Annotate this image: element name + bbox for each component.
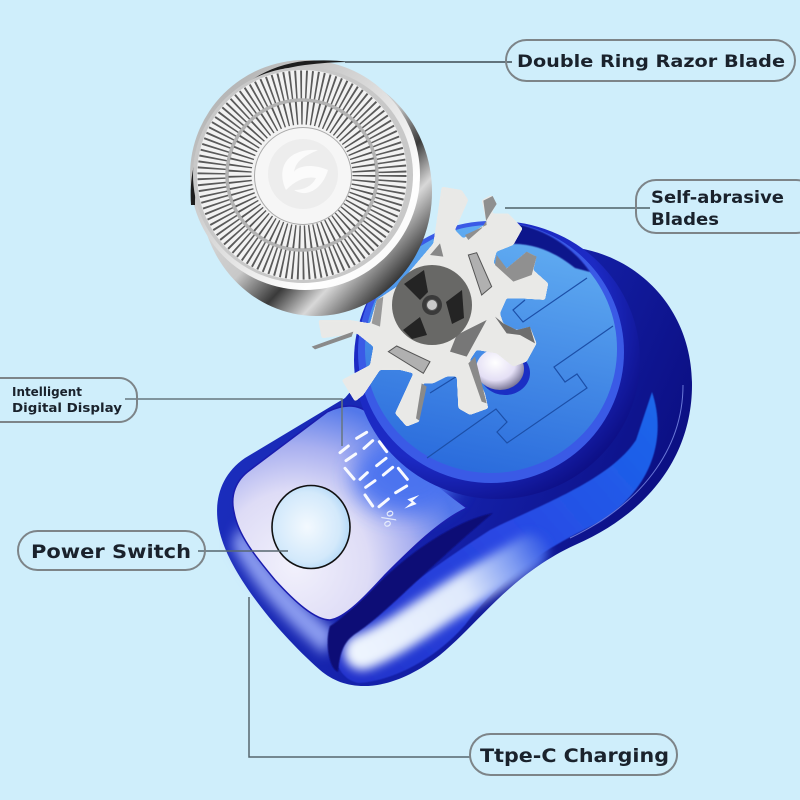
outer blade spokes xyxy=(212,85,392,265)
digital display xyxy=(340,432,419,530)
top shade stripes xyxy=(500,222,590,272)
middle ring xyxy=(227,100,377,250)
lower blue region xyxy=(336,392,658,683)
power button xyxy=(272,486,350,568)
callout: double ring razor blade: Double Ring Razor Blade xyxy=(517,52,785,72)
shaver body xyxy=(217,221,692,686)
callout: type-c charging xyxy=(249,597,677,775)
inner blade spokes xyxy=(240,113,364,237)
display glow xyxy=(353,439,457,515)
lower capsule highlight xyxy=(362,552,530,652)
blade outline xyxy=(312,187,548,427)
metal side xyxy=(200,68,432,316)
callout: intelligent digital display: Intelligent xyxy=(12,384,82,399)
back dark ring xyxy=(354,221,640,499)
callout: self-abrasive blades: Self-abrasive xyxy=(651,188,784,208)
navy band xyxy=(328,513,493,672)
callout: intelligent digital display: Digital Display xyxy=(12,400,122,415)
foil xyxy=(197,70,407,280)
callout: intelligent digital display xyxy=(0,378,342,446)
left edge highlight xyxy=(232,525,335,655)
self-abrasive blade star xyxy=(312,187,548,427)
callout: power switch: Power Switch xyxy=(31,541,191,563)
hub windows xyxy=(403,270,464,339)
hub screw xyxy=(422,295,442,315)
body shell xyxy=(217,240,692,686)
outer rim xyxy=(190,60,420,290)
pearl button xyxy=(476,348,530,395)
circuit lines xyxy=(427,278,613,458)
outer highlight line xyxy=(570,385,683,538)
razor head xyxy=(190,60,432,316)
callout: self-abrasive blades: Blades xyxy=(651,210,719,230)
callout: double ring razor blade xyxy=(345,40,795,81)
callout: type-c charging: Ttpe-C Charging xyxy=(480,745,669,767)
control panel xyxy=(233,406,467,620)
inner rim bevel xyxy=(193,67,413,283)
center logo xyxy=(268,139,338,209)
dark rim edge xyxy=(191,60,350,205)
center cap xyxy=(254,128,352,224)
inner blue disc xyxy=(365,225,617,473)
hub xyxy=(392,265,472,345)
callout: self-abrasive blades xyxy=(505,180,800,233)
light blue ring xyxy=(358,221,624,483)
digital display: % xyxy=(375,508,400,530)
callout: power switch xyxy=(18,531,288,570)
